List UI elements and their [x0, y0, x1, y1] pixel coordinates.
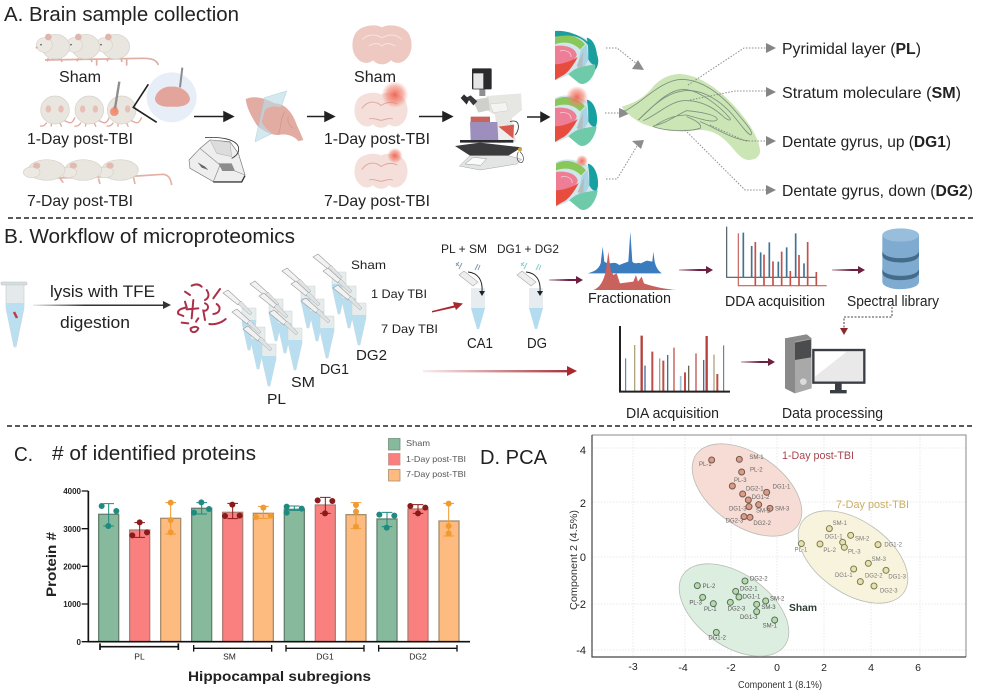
- sham sample labels: PL-1: [704, 607, 717, 613]
- error bars and data points: [99, 497, 454, 538]
- bar chart: protein counts: [43, 487, 470, 684]
- 7-day sample labels: SM-2: [855, 536, 870, 542]
- icon: peptides: [178, 285, 226, 332]
- icon: DG tube: [517, 262, 543, 329]
- sham sample labels: DG1-3: [740, 615, 758, 621]
- x-axis title: Hippocampal subregions: [188, 668, 371, 684]
- 7-day sample labels: SM-1: [833, 521, 848, 527]
- 7-day sample labels: DG1-1: [835, 573, 853, 579]
- group label: 7-Day post-TBI: 7-Day post-TBI: [836, 499, 909, 511]
- group label: Sham: Sham: [789, 602, 817, 614]
- label: 1-Day post-TBI section: 1-Day post-TBI: [324, 131, 430, 148]
- legend: Sham: [406, 438, 430, 448]
- group ellipses: [663, 425, 924, 675]
- icon: sham brain section: [352, 25, 412, 64]
- panel B: workflow of microproteomics: [1, 226, 940, 422]
- y-axis tick labels: 4: [580, 445, 586, 457]
- dotted link: library to processing: [840, 307, 892, 335]
- arrow: microscope to dissected sections: [527, 112, 549, 122]
- 7-day sample labels: DG1-1: [825, 534, 843, 540]
- icon: 7-day TBI mice: [23, 160, 172, 185]
- y-axis tick labels: 2000: [63, 562, 82, 572]
- 7-day points: [798, 526, 889, 589]
- sham points: [694, 578, 778, 635]
- label: Pyrimidal layer: Pyrimidal layer (PL): [782, 41, 921, 58]
- icon: computer: [785, 334, 864, 393]
- arrows: sections to hippocampus: [605, 48, 637, 179]
- arrow: mice to brain: [194, 112, 233, 121]
- 1-day sample labels: DG2-1: [746, 486, 764, 492]
- axes and group brackets: [82, 491, 470, 652]
- label: 7 Day TBI: 7 Day TBI: [381, 322, 438, 336]
- icon: CA1 tube: [456, 262, 485, 329]
- arrowheads: callouts: [766, 43, 776, 195]
- x-axis tick labels: 6: [915, 662, 921, 674]
- label: DG: DG: [527, 336, 547, 352]
- sham sample labels: PL-3: [689, 600, 703, 606]
- icon: microscope: [455, 68, 523, 170]
- label: DG1 + DG2: DG1 + DG2: [497, 242, 559, 256]
- chart: DDA spectra: [727, 227, 827, 286]
- 7-day sample labels: DG1-2: [884, 543, 903, 549]
- icon: dissected brain sections: [555, 31, 598, 210]
- label: DDA acquisition: DDA acquisition: [725, 294, 825, 310]
- sham sample labels: DG1-2: [708, 636, 727, 642]
- icon: 1-day TBI mice with probe: [40, 68, 197, 127]
- label: SM: SM: [291, 375, 315, 391]
- 1-day sample labels: DG1-3: [729, 507, 747, 513]
- panel A: brain sample collection: [4, 4, 973, 210]
- label: Sham section: Sham: [354, 69, 396, 86]
- arrow: brain to slices: [307, 112, 334, 121]
- arrow: to spectral library: [832, 266, 865, 274]
- x-axis group labels: DG1: [316, 652, 334, 662]
- 1-day sample labels: SM-3: [775, 507, 790, 513]
- 7-day sample labels: PL-1: [795, 548, 808, 554]
- 7-day sample labels: PL-2: [823, 548, 837, 554]
- icon: whole brain with slicing plane: [246, 91, 303, 142]
- label: Dentate gyrus down: Dentate gyrus, down (DG2): [782, 183, 973, 200]
- y-axis tick labels: -2: [576, 599, 586, 611]
- heading: A. Brain sample collection: A. Brain sample collection: [4, 4, 239, 26]
- sham sample labels: PL-2: [703, 584, 716, 590]
- sham sample labels: SM-1: [763, 623, 778, 629]
- 7-day sample labels: DG2-3: [880, 588, 898, 594]
- legend: 1-Day post-TBI: [406, 454, 466, 464]
- arrow: to fractionation: [549, 276, 583, 284]
- label: Data processing: Data processing: [782, 406, 883, 422]
- legend: [388, 438, 466, 481]
- 1-day sample labels: [699, 455, 791, 527]
- 1-day sample labels: DG1-2: [752, 495, 770, 501]
- x-axis tick labels: -3: [628, 661, 638, 673]
- 1-day sample labels: SM-2: [756, 508, 771, 514]
- y-axis tick labels: 4000: [63, 487, 82, 496]
- chart: fractionation peaks: [588, 232, 677, 290]
- long arrow: tubes to DIA: [423, 366, 577, 376]
- label: Sham: Sham: [351, 258, 386, 272]
- heading: C.: C.: [14, 444, 33, 466]
- sham sample labels: [689, 577, 785, 642]
- 1-day sample labels: PL-3: [734, 478, 747, 484]
- panel D: PCA: [480, 425, 966, 691]
- callout lines: hippocampal layers: [685, 48, 766, 190]
- icon: 1-day TBI brain section: [354, 81, 408, 128]
- panel C: number of identified proteins: [14, 438, 470, 684]
- arrowheads: section arrows: [619, 60, 644, 149]
- label: Stratum moleculare: Stratum moleculare (SM): [782, 85, 961, 102]
- label: 7-Day post-TBI mice: 7-Day post-TBI: [27, 193, 133, 210]
- tubes: DG1: [282, 268, 334, 358]
- bars: [99, 505, 459, 642]
- sham sample labels: DG2-2: [750, 577, 768, 583]
- label: PL + SM: PL + SM: [441, 242, 487, 256]
- arrow: to DDA: [679, 266, 713, 274]
- chart: DIA spectra: [620, 326, 730, 392]
- plot frame and grid: [592, 435, 966, 657]
- 1-day sample labels: DG1-1: [773, 485, 791, 491]
- 1-day sample labels: PL-1: [699, 462, 712, 468]
- y-axis tick labels: [576, 445, 586, 657]
- y-axis title: Protein #: [43, 532, 59, 597]
- label: PL: PL: [267, 392, 286, 408]
- heading: D. PCA: D. PCA: [480, 447, 548, 469]
- 1-day sample labels: DG2-3: [726, 518, 744, 524]
- tubes: SM: [250, 281, 302, 370]
- label: Spectral library: Spectral library: [847, 294, 940, 310]
- x-axis tick labels: 0: [774, 662, 780, 674]
- x-axis tick labels: [628, 661, 921, 674]
- label: Dentate gyrus up: Dentate gyrus, up (DG1): [782, 134, 951, 151]
- legend: 7-Day post-TBI: [406, 469, 466, 479]
- y-axis tick labels: [63, 487, 82, 647]
- sham sample labels: DG2-3: [728, 606, 746, 612]
- sham sample labels: DG1-1: [743, 594, 761, 600]
- 7-day sample labels: SM-3: [872, 557, 887, 563]
- 1-day sample labels: PL-2: [750, 468, 763, 474]
- label: DIA acquisition: DIA acquisition: [626, 406, 719, 422]
- x-axis title: Component 1 (8.1%): [738, 680, 822, 691]
- y-axis tick labels: 1000: [63, 600, 82, 609]
- tubes: PL: [223, 290, 276, 386]
- label: Sham mice: Sham: [59, 69, 101, 86]
- label: 1 Day TBI: 1 Day TBI: [371, 287, 427, 301]
- tubes: DG2: [313, 254, 366, 345]
- sham sample labels: SM-3: [761, 605, 776, 611]
- arrow: sections to microscope: [419, 112, 452, 121]
- icon: vibratome: [189, 137, 245, 182]
- icon: hippocampus: [622, 74, 760, 160]
- x-axis tick labels: 4: [868, 662, 874, 674]
- arrow: lysis: [33, 301, 171, 309]
- label: DG2: DG2: [356, 348, 387, 364]
- 7-day sample labels: DG1-3: [888, 575, 907, 581]
- icon: sample tube: [1, 282, 27, 347]
- 7-day sample labels: [795, 521, 907, 594]
- y-axis tick labels: 3000: [63, 525, 82, 534]
- x-axis group labels: DG2: [409, 652, 427, 662]
- label: Fractionation: Fractionation: [588, 291, 671, 307]
- 1-day points: [709, 456, 773, 520]
- heading: B. Workflow of microproteomics: B. Workflow of microproteomics: [4, 226, 295, 248]
- arrow: to data processing: [741, 358, 775, 366]
- sham sample labels: DG2-1: [740, 586, 758, 592]
- scatter plot: PCA: [569, 425, 966, 691]
- group label: 1-Day post-TBI: 1-Day post-TBI: [782, 450, 854, 462]
- x-axis group labels: PL: [134, 652, 145, 662]
- label: DG1: DG1: [320, 362, 349, 378]
- x-axis group labels: [134, 652, 427, 662]
- y-axis title: Component 2 (4.5%): [569, 510, 580, 610]
- y-axis tick labels: -4: [576, 645, 586, 657]
- icon: database: [882, 228, 919, 289]
- label: CA1: CA1: [467, 336, 493, 352]
- sham sample labels: SM-2: [770, 597, 785, 603]
- icon: 7-day TBI brain section: [354, 148, 408, 189]
- 7-day sample labels: DG2-2: [865, 574, 883, 580]
- 7-day sample labels: PL-3: [848, 550, 861, 556]
- label: 1-Day post-TBI mice: 1-Day post-TBI: [27, 131, 133, 148]
- x-axis group labels: SM: [223, 652, 236, 662]
- arrow: tubes to pooled samples: [432, 302, 463, 312]
- y-axis tick labels: 2: [580, 498, 586, 510]
- 1-day sample labels: DG2-2: [753, 521, 772, 527]
- x-axis tick labels: -2: [726, 662, 736, 674]
- x-axis tick labels: 2: [821, 662, 827, 674]
- y-axis tick labels: 0: [580, 552, 586, 564]
- label: digestion: digestion: [60, 313, 130, 332]
- label: lysis with TFE: lysis with TFE: [50, 282, 155, 301]
- label: 7-Day post-TBI section: 7-Day post-TBI: [324, 193, 430, 210]
- y-axis tick labels: 0: [77, 638, 82, 647]
- icon: sham mice: [36, 34, 158, 66]
- heading: # of identified proteins: # of identified proteins: [52, 443, 256, 465]
- x-axis tick labels: -4: [678, 662, 688, 674]
- 1-day sample labels: SM-1: [749, 455, 764, 461]
